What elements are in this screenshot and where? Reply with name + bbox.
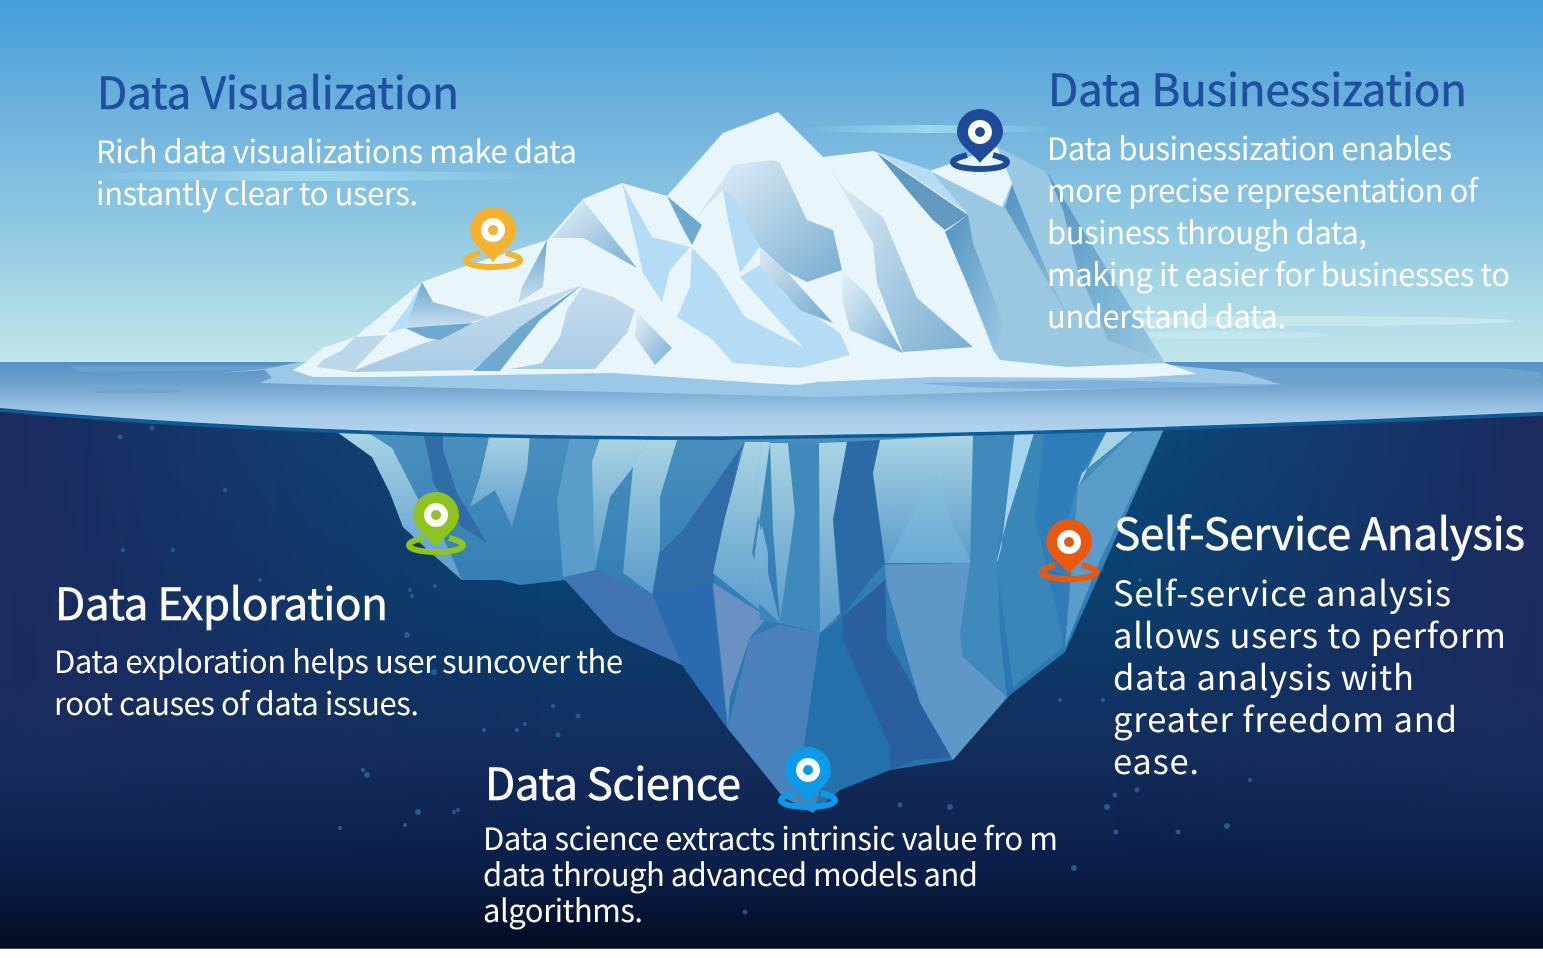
underwater iceberg [337,420,1168,813]
description: allows users to perform [1113,608,1506,658]
block: Data Visualization [96,58,577,214]
description [96,127,577,214]
pin: navy [953,109,1007,169]
description: data through advanced models and [483,850,978,895]
description: making it easier for businesses to [1047,250,1510,295]
description [1047,124,1510,337]
description: more precise representation of [1047,166,1480,211]
heading: Data Science [485,749,741,813]
shaded facets: left [317,183,702,372]
underwater particles [58,426,1252,914]
description: instantly clear to users. [96,169,418,214]
shaded facets: right [877,147,1165,367]
pin: orange [1042,519,1096,579]
waterline [0,410,1543,438]
description: Data exploration helps user suncover the [54,637,623,682]
description: data analysis with [1113,650,1414,700]
sea highlights [70,362,1540,397]
description [54,637,623,724]
description: greater freedom and [1113,692,1457,742]
pin: yellow [466,207,520,267]
description: ease. [1113,734,1199,784]
shaded facets: centre [677,160,973,368]
heading: Data Visualization [97,58,459,122]
block: Data Exploration [54,569,623,724]
block: Data Businessization [1047,55,1510,337]
heading: Data Businessization [1048,55,1467,119]
description: business through data, [1047,208,1367,253]
bottom edge line [0,948,1543,949]
heading: Self-Service Analysis [1114,499,1525,563]
iceberg above water [293,112,1197,385]
description: understand data. [1047,292,1286,337]
description [483,814,1058,931]
sky streaks [60,125,1515,339]
sky background [0,0,1543,364]
block: Self-Service Analysis [1113,499,1525,784]
deep ocean [0,405,1543,948]
lower facets [565,563,1007,813]
heading: Data Exploration [55,569,388,633]
upper facets [337,423,1167,697]
description: Data businessization enables [1047,124,1452,169]
sea surface [0,362,1543,437]
description: root causes of data issues. [54,679,419,724]
description: algorithms. [483,886,643,931]
pin: light blue [781,747,835,807]
block: Data Science [483,749,1058,931]
description: Data science extracts intrinsic value fro m [483,814,1058,859]
pin: green [409,492,463,552]
description: Self-service analysis [1113,566,1451,616]
description: Rich data visualizations make data [96,127,577,172]
ice body [293,112,1197,385]
description [1113,566,1506,784]
